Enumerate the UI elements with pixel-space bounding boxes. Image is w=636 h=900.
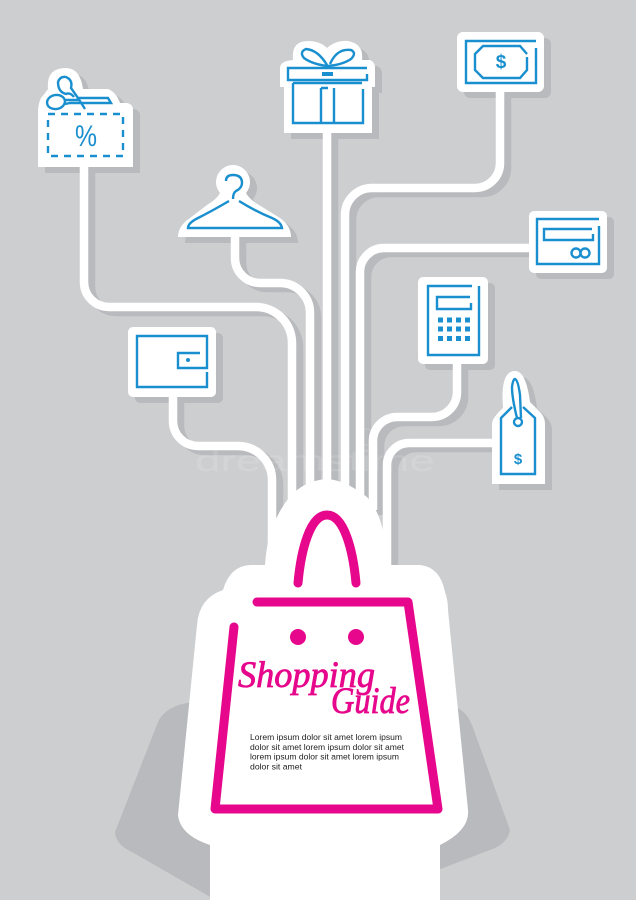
icon: wallet <box>128 327 216 397</box>
title: Shopping Guide <box>238 655 410 722</box>
connecting wires <box>84 90 535 570</box>
watermark: dreamstime <box>195 445 435 478</box>
wire: gift <box>323 130 331 500</box>
title: Shopping Guide: Shopping <box>238 655 375 696</box>
bag handle <box>298 515 356 583</box>
icon: banknote: $ <box>496 52 507 73</box>
icon: price tag <box>492 371 545 484</box>
body text <box>250 732 405 772</box>
bag eyelets <box>290 629 364 645</box>
shopping bag panel <box>178 479 468 900</box>
icon: clothes hanger <box>178 165 291 237</box>
body text: Lorem ipsum dolor sit amet lorem ipsum <box>250 732 402 742</box>
icon: gift box <box>280 41 375 133</box>
wire: credit card <box>360 248 535 500</box>
icon: coupon and scissors: % <box>75 120 97 153</box>
white bag silhouette with sleeve <box>178 479 468 900</box>
bag outline <box>215 602 438 809</box>
wire: wallet <box>173 395 272 570</box>
person arm shadows <box>115 700 510 898</box>
wire: banknote <box>345 90 500 500</box>
wire: price tag <box>387 443 495 570</box>
icon: coupon and scissors <box>38 68 133 167</box>
icon: price tag: $ <box>514 451 523 468</box>
title: Shopping Guide: Guide <box>331 681 410 722</box>
body text: lorem ipsum dolor sit amet lorem ipsum <box>250 752 399 762</box>
wire: calculator <box>373 360 457 510</box>
wire shadows <box>91 95 542 567</box>
wire: coupon <box>84 160 292 510</box>
icon: calculator <box>418 277 488 364</box>
body text: dolor sit amet <box>250 762 303 772</box>
body text: dolor sit amet lorem ipsum dolor sit amet <box>250 742 405 752</box>
wire: hanger <box>235 230 310 500</box>
watermark <box>195 429 435 478</box>
icon: credit card <box>529 211 607 273</box>
icon: banknote <box>457 32 544 92</box>
icon tile shadows <box>45 38 614 490</box>
